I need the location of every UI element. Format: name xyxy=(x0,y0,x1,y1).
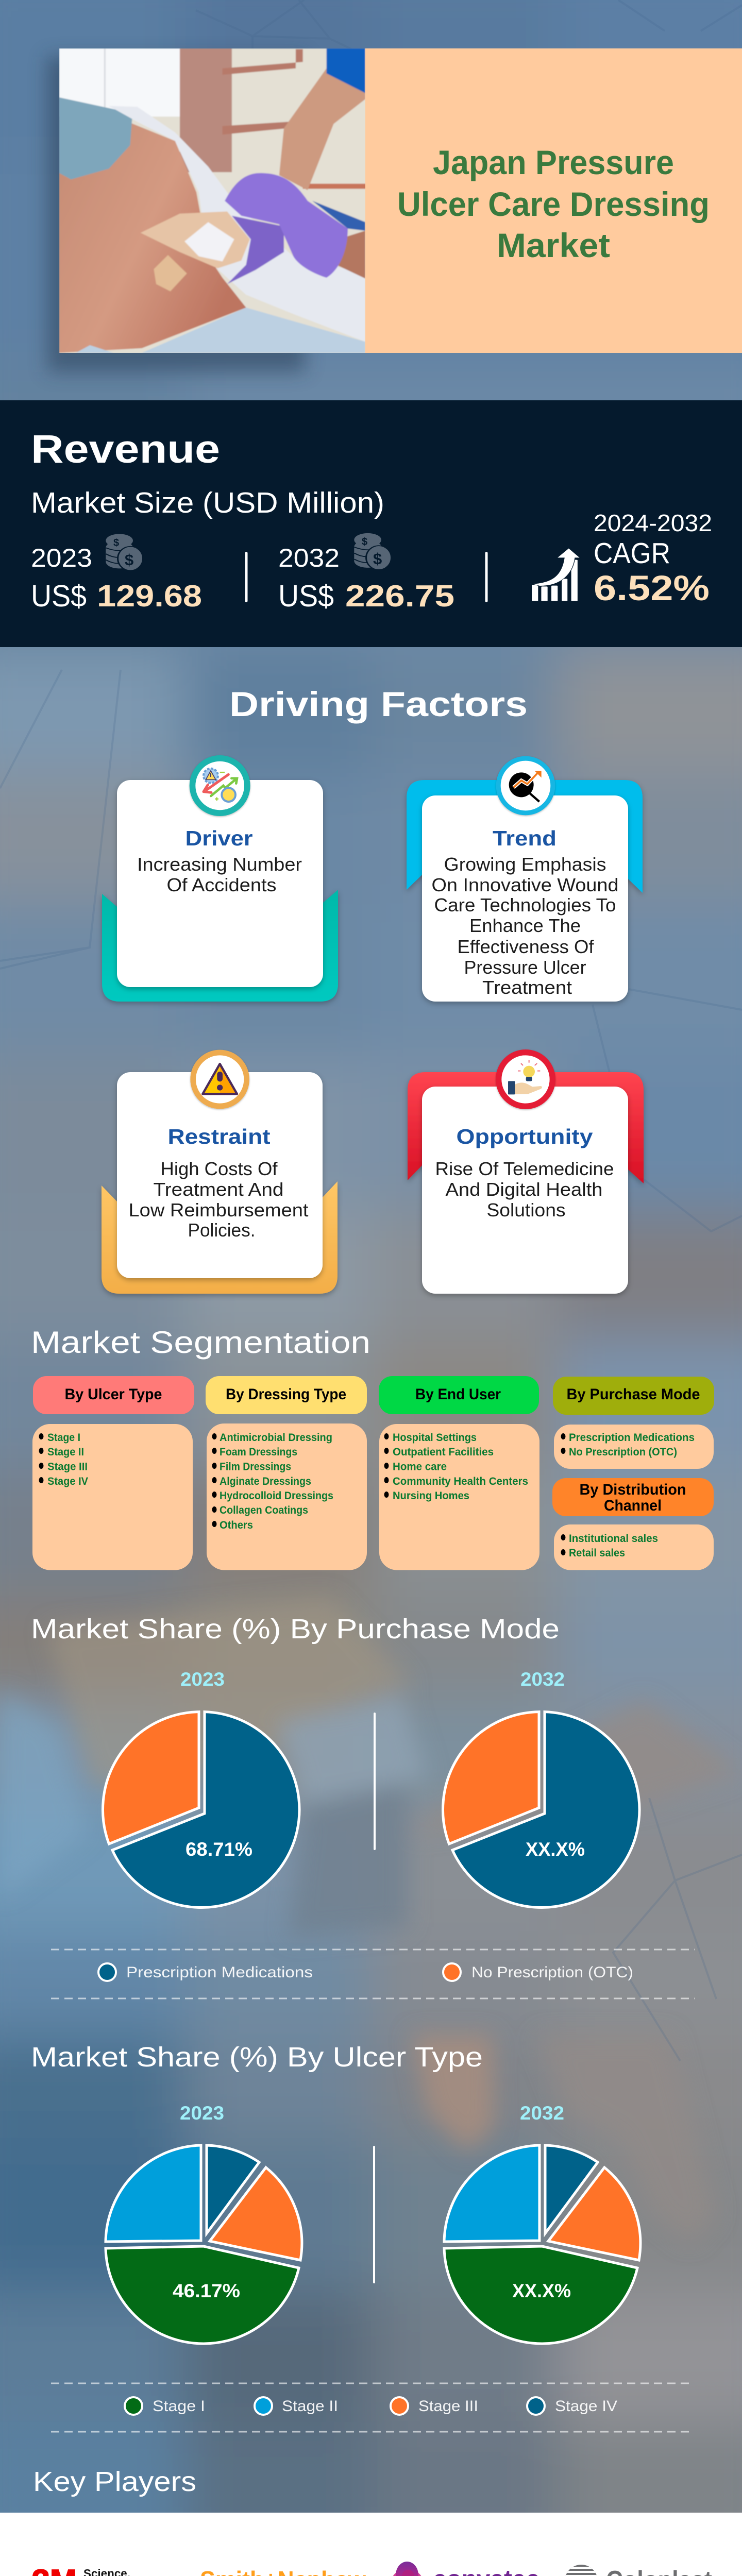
dressing type list: Antimicrobial Dressing xyxy=(220,1432,332,1444)
by purchase mode: By Purchase Mode xyxy=(567,1386,700,1403)
legend: ulcer type: Stage I xyxy=(153,2398,205,2415)
dressing type list xyxy=(207,1423,367,1570)
legend: purchase mode: Prescription Medications xyxy=(126,1964,313,1981)
chart: purchase mode 2032: 2032 xyxy=(520,1669,565,1690)
icon: trend badge xyxy=(496,756,555,815)
end user list: Outpatient Facilities xyxy=(393,1446,494,1458)
heading: driving factors: Driving Factors xyxy=(229,685,528,724)
chart: ulcer type 2032 xyxy=(444,2103,640,2344)
by ulcer type xyxy=(33,1376,194,1414)
opportunity text xyxy=(435,1158,614,1221)
divider xyxy=(485,552,487,602)
2023 value: US$ xyxy=(31,579,87,613)
opportunity text: And Digital Health xyxy=(445,1179,603,1200)
ulcer type list: Stage III xyxy=(47,1461,88,1472)
legend: ulcer type: Stage III xyxy=(418,2398,478,2415)
logo: 3M xyxy=(32,2564,176,2576)
end user list: Community Health Centers xyxy=(393,1476,528,1487)
chart: ulcer type 2032: XX.X% xyxy=(512,2280,571,2301)
icon: coins 2032 dollar signs: $ xyxy=(362,536,367,548)
trend text: Enhance The xyxy=(469,915,581,936)
trend text: Growing Emphasis xyxy=(444,854,606,875)
CAGR: 2024-2032 xyxy=(594,510,712,536)
dressing type list: Others xyxy=(220,1519,253,1531)
chart: purchase mode 2023: 2023 xyxy=(180,1669,225,1690)
legend: ulcer type: Stage II xyxy=(282,2398,338,2415)
heading: market segmentation: Market Segmentation xyxy=(31,1325,370,1360)
icon: growth arrow xyxy=(532,548,580,601)
dressing type list: Foam Dressings xyxy=(220,1446,297,1458)
by dressing type xyxy=(206,1376,367,1414)
chart: ulcer type 2032: 2032 xyxy=(520,2103,564,2124)
revenue heading: Revenue xyxy=(31,427,220,471)
2032 value: US$ xyxy=(278,579,334,613)
by distribution channel: By Distribution xyxy=(579,1481,686,1498)
chart: ulcer type 2023: 46.17% xyxy=(173,2280,240,2301)
icon: coins 2032 dollar signs xyxy=(362,536,382,568)
restraint text xyxy=(129,1158,308,1241)
icon: restraint badge xyxy=(190,1050,249,1109)
by distribution channel xyxy=(552,1478,714,1516)
ulcer type list: Stage II xyxy=(47,1446,84,1458)
by purchase mode xyxy=(553,1377,714,1415)
title text: Ulcer Care Dressing xyxy=(397,185,710,223)
driver text: Increasing Number xyxy=(137,854,302,875)
ulcer type list: Stage IV xyxy=(47,1476,88,1487)
icon: coins 2023 dollar signs: $ xyxy=(113,537,119,549)
legend: purchase mode: No Prescription (OTC) xyxy=(471,1964,633,1981)
by dressing type: By Dressing Type xyxy=(226,1386,346,1403)
divider xyxy=(373,2146,375,2283)
2023 value: 129.68 xyxy=(97,579,202,613)
distribution channel list xyxy=(554,1524,714,1570)
2023 value xyxy=(31,544,202,613)
opportunity text: Solutions xyxy=(486,1199,566,1221)
photo shadow xyxy=(47,57,305,372)
legend: purchase mode xyxy=(51,1950,695,1998)
purchase mode list xyxy=(554,1425,714,1469)
icon: coins 2032 dollar signs: $ xyxy=(373,550,382,568)
title text xyxy=(397,143,710,264)
by distribution channel: Channel xyxy=(604,1497,662,1514)
icon: coins 2023 dollar signs: $ xyxy=(125,551,133,569)
chart: ulcer type 2023: 2023 xyxy=(180,2103,224,2124)
heading: share by purchase mode: Market Share (%) By Purchase Mode xyxy=(31,1614,560,1645)
trend text: Care Technologies To xyxy=(434,894,616,916)
trend text xyxy=(432,854,618,998)
hero photo: nurse applying pressure ulcer dressing xyxy=(59,48,367,354)
icon: opportunity badge xyxy=(496,1049,555,1109)
dressing type list: Collagen Coatings xyxy=(220,1504,308,1516)
dressing type list: Film Dressings xyxy=(220,1461,291,1472)
purchase mode list: Prescription Medications xyxy=(569,1432,695,1444)
title text: Japan Pressure xyxy=(433,143,674,181)
driver text xyxy=(137,854,302,895)
end user list: Nursing Homes xyxy=(393,1490,469,1502)
chart: purchase mode 2023: 68.71% xyxy=(185,1839,252,1860)
ulcer type list xyxy=(32,1424,193,1570)
panel: driver xyxy=(102,755,338,1002)
chart: ulcer type 2023 xyxy=(106,2103,302,2344)
by end user xyxy=(379,1376,539,1414)
panel: restraint xyxy=(102,1050,338,1294)
2032 value: 226.75 xyxy=(345,579,454,613)
trend text: Pressure Ulcer xyxy=(464,957,586,978)
title text: Market xyxy=(497,226,610,264)
divider xyxy=(245,552,247,602)
divider xyxy=(374,1713,376,1850)
purchase mode list: No Prescription (OTC) xyxy=(569,1446,677,1458)
by ulcer type: By Ulcer Type xyxy=(65,1386,162,1403)
driver heading: Driver xyxy=(185,826,253,850)
restraint text: High Costs Of xyxy=(161,1158,278,1179)
icon: coins 2023 dollar signs xyxy=(113,537,133,569)
CAGR: CAGR xyxy=(594,537,670,570)
distribution channel list: Retail sales xyxy=(569,1547,625,1559)
title panel xyxy=(365,48,742,353)
panel: trend xyxy=(407,756,643,1002)
trend text: On Innovative Wound xyxy=(432,874,618,895)
restraint text: Policies. xyxy=(188,1219,256,1241)
icon: coins 2023 xyxy=(106,534,143,570)
opportunity heading: Opportunity xyxy=(457,1125,593,1148)
end user list xyxy=(379,1424,539,1570)
chart: purchase mode 2032 xyxy=(443,1669,639,1908)
restraint text: Treatment And xyxy=(154,1179,283,1200)
dressing type list: Alginate Dressings xyxy=(220,1476,311,1487)
trend text: Effectiveness Of xyxy=(458,936,594,957)
CAGR: 6.52% xyxy=(594,568,710,608)
logo: Coloplast xyxy=(565,2565,712,2576)
trend text: Treatment xyxy=(482,977,572,998)
panel: opportunity xyxy=(408,1049,644,1294)
legend: ulcer type: Stage IV xyxy=(555,2398,617,2415)
driver text: Of Accidents xyxy=(167,874,276,895)
restraint heading: Restraint xyxy=(168,1125,271,1148)
logo: Convatec xyxy=(391,2562,539,2576)
2032 value: 2032 xyxy=(278,544,340,572)
trend heading: Trend xyxy=(493,826,556,850)
chart: purchase mode 2032: XX.X% xyxy=(526,1839,585,1860)
end user list: Hospital Settings xyxy=(393,1432,477,1444)
revenue band xyxy=(0,400,742,647)
opportunity text: Rise Of Telemedicine xyxy=(435,1158,614,1179)
chart: purchase mode 2023 xyxy=(103,1669,299,1908)
2032 value xyxy=(278,544,454,613)
heading: share by ulcer type: Market Share (%) By Ulcer Type xyxy=(31,2042,483,2073)
market size label: Market Size (USD Million) xyxy=(31,486,384,519)
end user list: Home care xyxy=(393,1461,447,1472)
icon: driver badge xyxy=(190,755,250,816)
heading: key players: Key Players xyxy=(33,2466,196,2497)
panel: segmentation xyxy=(32,1376,714,1570)
dressing type list: Hydrocolloid Dressings xyxy=(220,1490,333,1502)
CAGR xyxy=(594,510,712,608)
restraint text: Low Reimbursement xyxy=(129,1199,308,1221)
by end user: By End User xyxy=(415,1386,501,1403)
ulcer type list: Stage I xyxy=(47,1432,80,1444)
panel: key players xyxy=(0,2513,742,2576)
distribution channel list: Institutional sales xyxy=(569,1533,658,1545)
icon: coins 2032 xyxy=(354,533,392,570)
2023 value: 2023 xyxy=(31,544,92,572)
legend: ulcer type xyxy=(51,2383,694,2432)
